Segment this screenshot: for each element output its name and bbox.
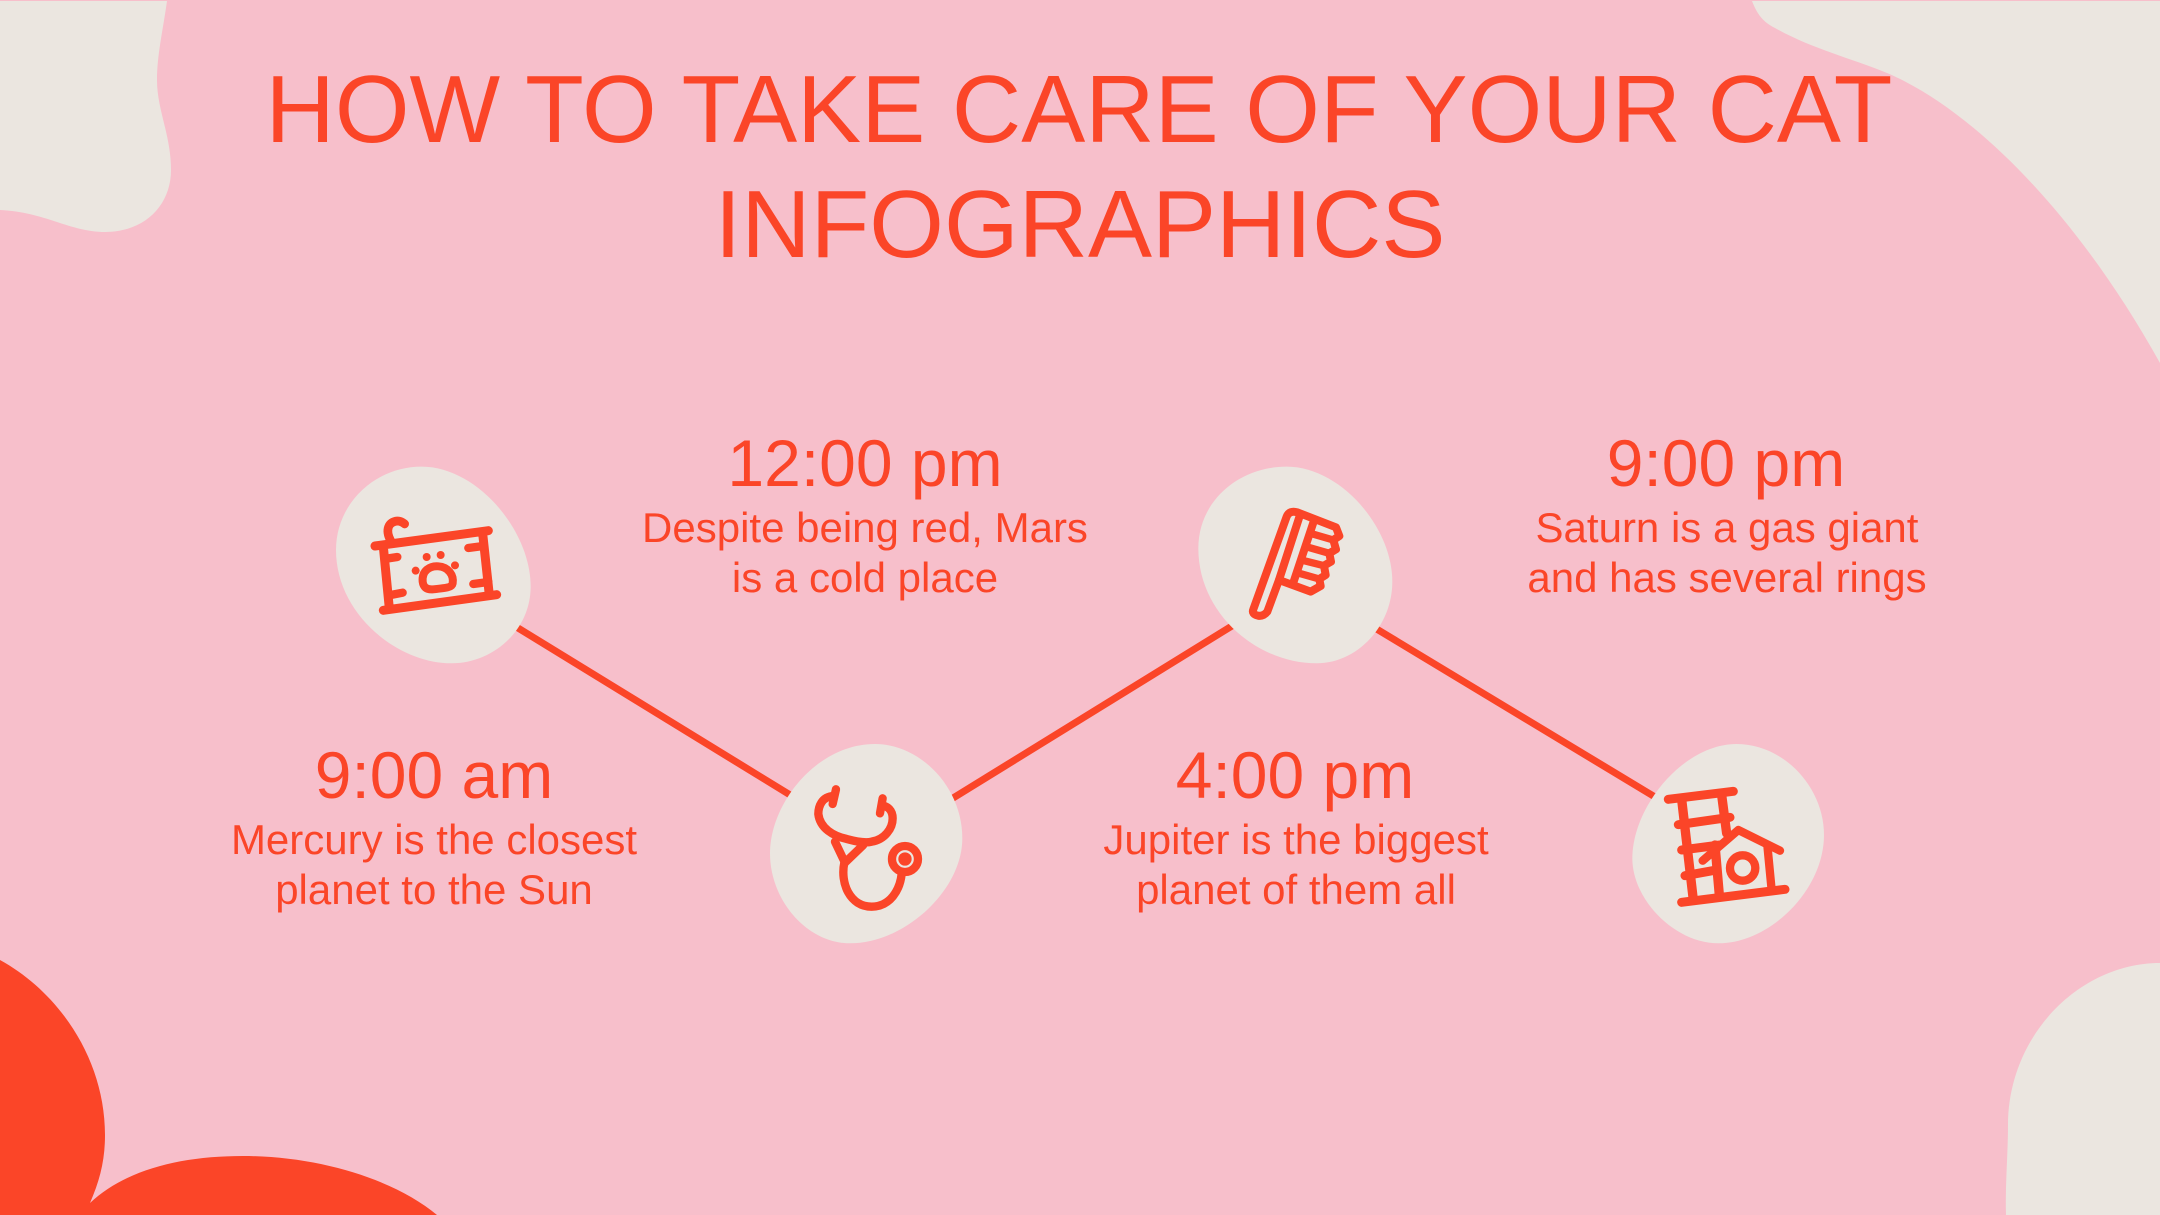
icon: comb xyxy=(1253,512,1339,616)
step 2: stethoscope icon badge xyxy=(770,744,962,943)
text block: 12:00 pm: Despite being red, Mars xyxy=(642,504,1088,551)
text block: 4:00 pm: Jupiter is the biggest xyxy=(1103,816,1489,863)
text block: 9:00 pm xyxy=(1527,426,1927,601)
text block: 9:00 am: planet to the Sun xyxy=(275,866,593,913)
text block: 9:00 pm: 9:00 pm xyxy=(1607,426,1845,500)
badge blob xyxy=(770,744,962,943)
corner shape: bottom left xyxy=(0,960,437,1215)
text block: 9:00 pm: Saturn is a gas giant xyxy=(1536,504,1919,551)
icon: stethoscope xyxy=(818,789,918,907)
icon: cat tree with house xyxy=(1668,791,1785,902)
step 1: bed icon badge xyxy=(336,467,531,663)
title: HOW TO TAKE CARE OF YOUR CAT xyxy=(266,56,1892,163)
corner shape: top left xyxy=(0,1,171,232)
text block: 9:00 am xyxy=(231,738,637,913)
title xyxy=(266,56,1892,278)
text block: 12:00 pm: 12:00 pm xyxy=(727,426,1003,500)
corner shape: top right xyxy=(1752,1,2160,363)
corner shape: bottom right xyxy=(2006,963,2160,1215)
text block: 9:00 am: Mercury is the closest xyxy=(231,816,637,863)
badge blob xyxy=(1632,744,1824,943)
badge blob xyxy=(336,467,531,663)
text block: 4:00 pm xyxy=(1103,738,1489,913)
step 3: comb icon badge xyxy=(1198,467,1392,663)
text block: 12:00 pm: is a cold place xyxy=(732,554,998,601)
text block: 9:00 am: 9:00 am xyxy=(315,738,553,812)
badge blob xyxy=(1198,467,1392,663)
text block: 12:00 pm xyxy=(642,426,1088,601)
text block: 4:00 pm: planet of them all xyxy=(1136,866,1456,913)
text block: 4:00 pm: 4:00 pm xyxy=(1176,738,1414,812)
title: INFOGRAPHICS xyxy=(715,171,1445,278)
text block: 9:00 pm: and has several rings xyxy=(1527,554,1927,601)
timeline connector lines xyxy=(505,620,1660,803)
icon: cat bed with paw xyxy=(375,521,497,610)
step 4: cat tree house icon badge xyxy=(1632,744,1824,943)
